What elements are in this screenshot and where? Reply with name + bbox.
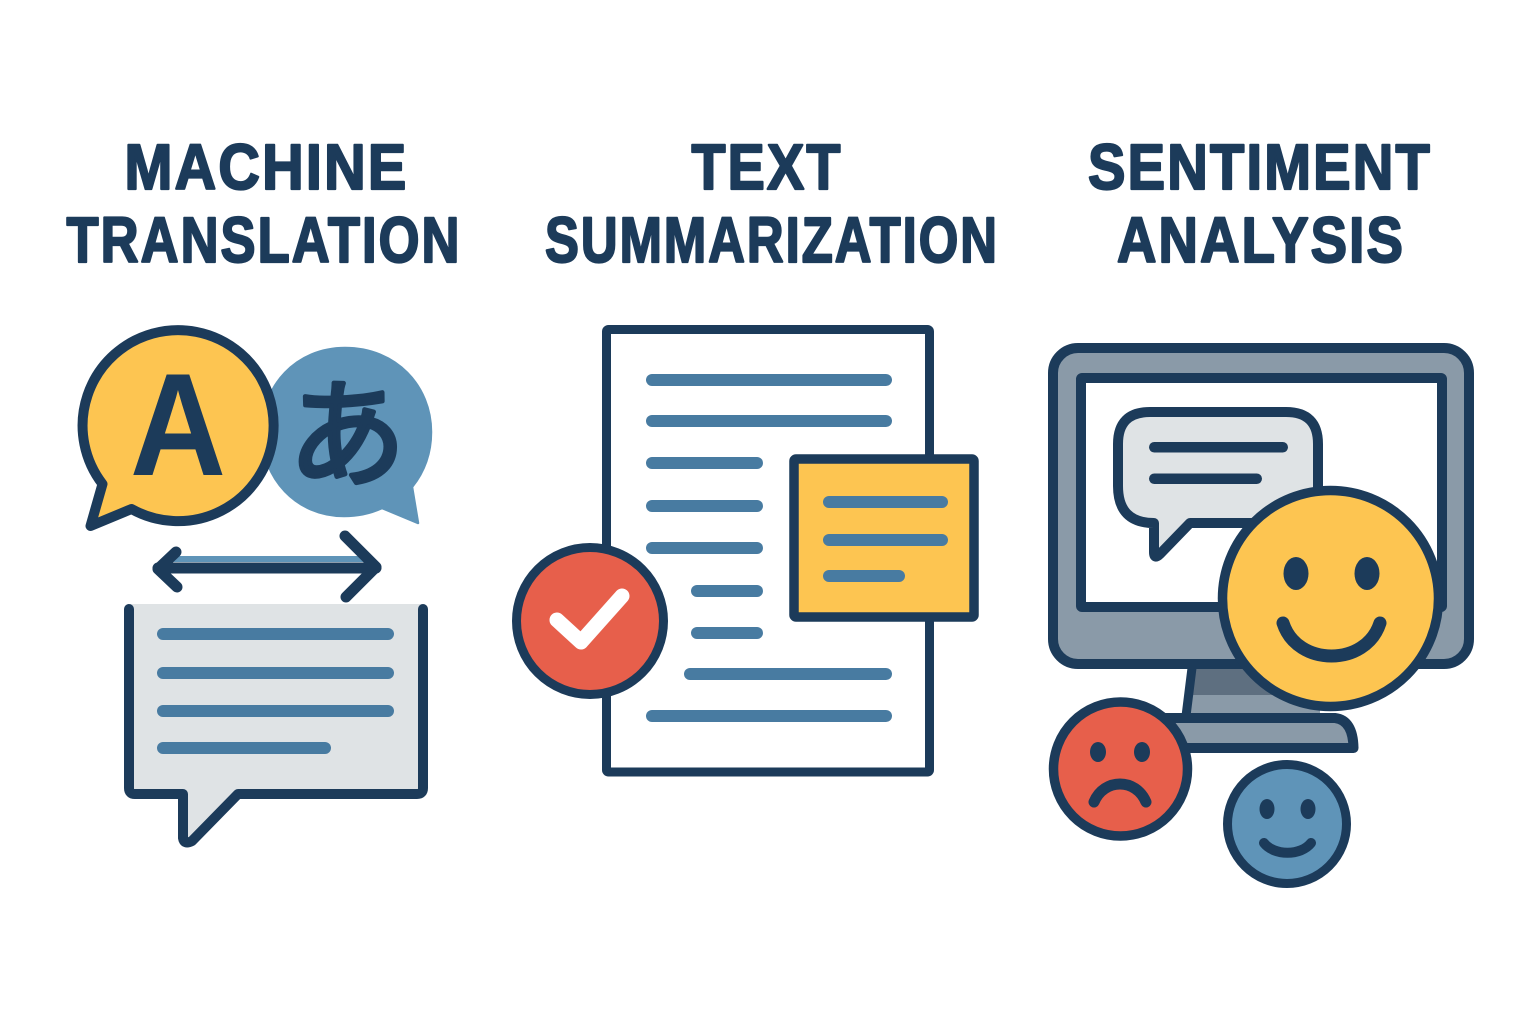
icon: blue speech bubble with hiragana xyxy=(262,340,431,523)
heading: sentiment analysis: SENTIMENT xyxy=(1088,131,1432,203)
icon: yellow speech bubble with letter A xyxy=(83,330,274,526)
icon: happy yellow face xyxy=(1222,490,1438,706)
icon: computer monitor xyxy=(1053,348,1469,748)
arrow: two-way translation arrow xyxy=(158,536,376,597)
panel: yellow summary note xyxy=(794,459,974,617)
icon: smiling blue face xyxy=(1228,764,1346,884)
text lines xyxy=(646,374,892,722)
icon: sentiment analysis xyxy=(1053,348,1469,884)
heading: machine translation: MACHINE xyxy=(124,131,408,203)
icon: machine translation xyxy=(83,330,431,842)
monitor body and screen xyxy=(1053,348,1469,664)
text lines xyxy=(157,628,394,754)
icon: sad red face xyxy=(1054,702,1188,836)
heading: machine translation: TRANSLATION xyxy=(66,204,462,276)
panel: document page xyxy=(606,330,930,772)
heading: sentiment analysis xyxy=(1088,131,1432,276)
icon: speech bubble on screen xyxy=(1118,412,1318,557)
icon: red check badge xyxy=(516,548,664,694)
heading: text summarization: TEXT xyxy=(692,131,842,203)
icon: yellow speech bubble with letter A: A xyxy=(130,343,226,506)
icon: blue speech bubble with hiragana: あ xyxy=(288,340,406,511)
icon: text summarization xyxy=(516,330,974,772)
heading: text summarization xyxy=(545,131,999,276)
monitor stand xyxy=(1160,668,1354,748)
heading: text summarization: SUMMARIZATION xyxy=(545,204,999,276)
panel: translated text speech bubble xyxy=(129,604,423,842)
heading: machine translation xyxy=(66,131,462,276)
heading: sentiment analysis: ANALYSIS xyxy=(1117,204,1405,276)
